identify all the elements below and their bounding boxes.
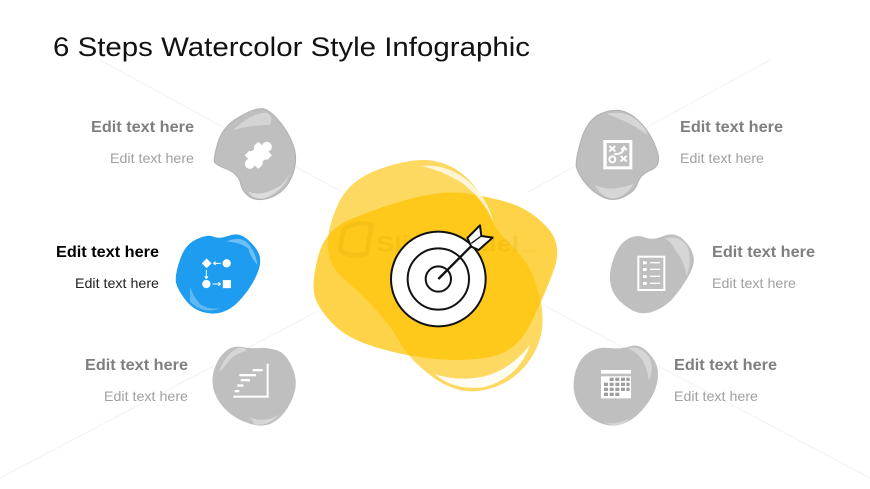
step 5 gray blob: checklist [610, 234, 694, 313]
step 5 label: Edit text here [712, 275, 796, 291]
step 6 label: Edit text here [674, 388, 758, 404]
watermark [340, 223, 536, 257]
glare highlights [422, 166, 530, 388]
step 6 gray blob: calendar [574, 345, 658, 426]
step 2 label: Edit text here [75, 275, 159, 291]
icon: calendar [601, 370, 631, 398]
step 2 label [56, 244, 159, 291]
step 6 label: Edit text here [674, 357, 777, 374]
icon: checklist [638, 257, 664, 290]
step 3 label: Edit text here [85, 357, 188, 374]
step 5 label: Edit text here [712, 244, 815, 261]
step 6 label [674, 357, 777, 404]
icon: staircase chart [233, 364, 269, 398]
central yellow watercolor blob with target icon [314, 160, 557, 391]
yellow blob: back layer [328, 160, 543, 391]
step 5 label [712, 244, 815, 291]
step 1 label: Edit text here [110, 150, 194, 166]
step 1 gray blob: puzzle [214, 109, 296, 200]
icon: strategy map [603, 140, 632, 169]
step 4 label: Edit text here [680, 119, 783, 136]
step 3 gray blob: staircase chart [212, 347, 296, 426]
step 4 gray blob: strategy map [576, 110, 659, 199]
step 1 label [91, 119, 194, 166]
icon: puzzle piece [236, 133, 281, 178]
step 4 label [680, 119, 783, 166]
step 2 label: Edit text here [56, 244, 159, 261]
step 4 label: Edit text here [680, 150, 764, 166]
watermark: .com [521, 247, 536, 254]
title: 6 Steps Watercolor Style Infographic [53, 32, 530, 62]
watermark: SlideModel [376, 232, 519, 257]
icon: process flow [202, 259, 231, 288]
step 2 blue blob: process flow [176, 234, 260, 314]
step 1 label: Edit text here [91, 119, 194, 136]
step 3 label [85, 357, 188, 404]
step 3 label: Edit text here [104, 388, 188, 404]
icon: target with arrow [391, 225, 493, 326]
yellow blob: front layer [314, 192, 557, 360]
